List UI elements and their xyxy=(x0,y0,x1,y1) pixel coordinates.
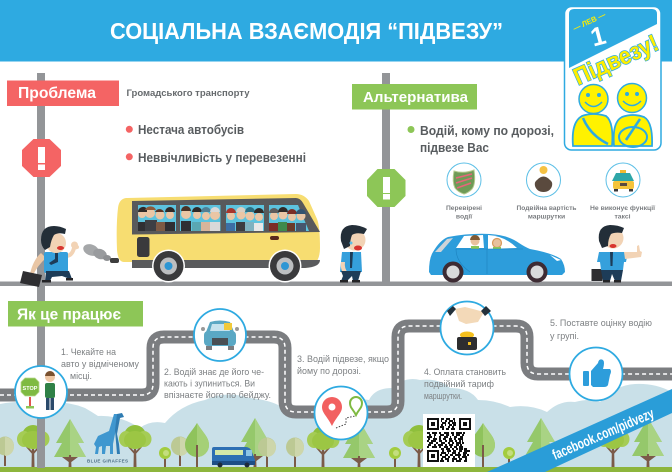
problem subtitle: Громадського транспорту xyxy=(126,88,250,99)
alternative heading: Альтернатива xyxy=(363,90,469,106)
caption: double price xyxy=(516,204,576,220)
bus wheels xyxy=(152,250,302,282)
badge: Підвезу sign xyxy=(564,6,663,150)
step 4 text: маршрутки. xyxy=(424,391,462,401)
step 5 icon: thumbs up xyxy=(570,348,622,400)
caption: not a taxi: Не виконує функції xyxy=(590,204,656,212)
step 2 icon: car with badge xyxy=(194,309,246,361)
icon: green warning octagon xyxy=(367,169,406,207)
icon: red warning octagon xyxy=(22,139,61,177)
step 1 text: місці. xyxy=(70,371,92,381)
badge driver xyxy=(614,84,652,147)
landscape: trees xyxy=(0,418,664,469)
step 5 text: у групі. xyxy=(550,331,579,341)
step 3 text: 3. Водій підвезе, якщо xyxy=(297,354,389,364)
mini bus xyxy=(212,447,255,468)
alternative bullet: Водій, кому по дорозі, xyxy=(420,124,554,138)
exhaust smoke xyxy=(82,242,119,263)
step 2 text: кають і зупиниться. Ви xyxy=(164,378,255,388)
icon: taxi xyxy=(606,163,640,197)
winding road xyxy=(0,326,672,412)
caption: checked drivers: Перевірені xyxy=(446,204,482,212)
step 5 text: 5. Поставте оцінку водію xyxy=(550,318,652,328)
badge passenger xyxy=(573,84,612,146)
caption: checked drivers: водії xyxy=(456,212,473,220)
landscape: clouds xyxy=(0,379,672,468)
character: running man xyxy=(20,226,78,287)
icon: shield xyxy=(447,163,481,197)
icon: coin purse xyxy=(526,163,560,197)
step 1 text: авто у відміченому xyxy=(61,359,139,369)
problem bullet 1: Нестача автобусів xyxy=(138,123,244,137)
step 1 icon: stop sign and man: STOP xyxy=(23,386,38,392)
car windows with passengers xyxy=(435,235,517,252)
caption: double price: Подвійна вартість xyxy=(516,204,576,212)
step 4 text: 4. Оплата становить xyxy=(424,367,506,377)
step 1 icon: stop sign and man xyxy=(15,366,67,418)
alternative bullet xyxy=(408,124,554,155)
badge brand text: Підвезу! xyxy=(569,30,663,91)
car xyxy=(429,234,565,282)
problem heading: Проблема xyxy=(18,85,96,102)
alternative heading xyxy=(352,84,477,110)
ground xyxy=(0,467,672,472)
step 1 text: 1. Чекайте на xyxy=(61,347,117,357)
caption: not a taxi xyxy=(590,204,656,220)
car wheels xyxy=(442,262,548,282)
header banner xyxy=(0,0,672,62)
logo: blue giraffes xyxy=(87,413,128,464)
step 5 text xyxy=(550,318,652,341)
bus windows with passengers xyxy=(138,205,309,231)
caption: checked drivers xyxy=(446,204,482,220)
character: sad man xyxy=(340,225,367,282)
logo: blue giraffes: BLUE GIRAFFES xyxy=(87,458,128,464)
step 2 text xyxy=(164,367,271,400)
character: hitchhiking man xyxy=(592,225,642,282)
step 4 text: подвійний тариф xyxy=(424,379,494,389)
step 2 text: 2. Водій знає де його че- xyxy=(164,367,264,377)
step 3 text xyxy=(297,354,389,376)
right sign pole xyxy=(382,73,390,282)
badge label: — ЛЕВ — xyxy=(572,10,607,33)
bus xyxy=(82,194,320,282)
step 4 icon: handshake and wallet xyxy=(440,302,494,354)
problem bullet 2: Неввічливість у перевезенні xyxy=(138,151,306,165)
step 4 text xyxy=(424,367,506,401)
step 1 text xyxy=(61,347,139,381)
how it works heading xyxy=(8,301,143,326)
step 3 text: йому по дорозі. xyxy=(297,366,361,376)
left sign pole xyxy=(37,73,45,468)
QR code xyxy=(423,414,475,467)
title: СОЦІАЛЬНА ВЗАЄМОДІЯ “ПІДВЕЗУ” xyxy=(110,18,503,44)
how it works heading: Як це працює xyxy=(17,306,121,324)
problem heading xyxy=(7,80,119,106)
panel: alternative xyxy=(352,84,656,220)
badge number: 1 xyxy=(587,20,609,52)
panel: problem xyxy=(7,80,306,177)
caption: not a taxi: таксі xyxy=(614,212,631,220)
caption: double price: маршрутки xyxy=(528,214,565,220)
facebook banner xyxy=(487,389,672,472)
step 2 text: впізнаєте його по бейджу. xyxy=(164,390,271,400)
step 3 icon: map route xyxy=(314,386,368,440)
street line xyxy=(0,282,672,286)
alternative bullet: підвезе Вас xyxy=(420,141,489,155)
